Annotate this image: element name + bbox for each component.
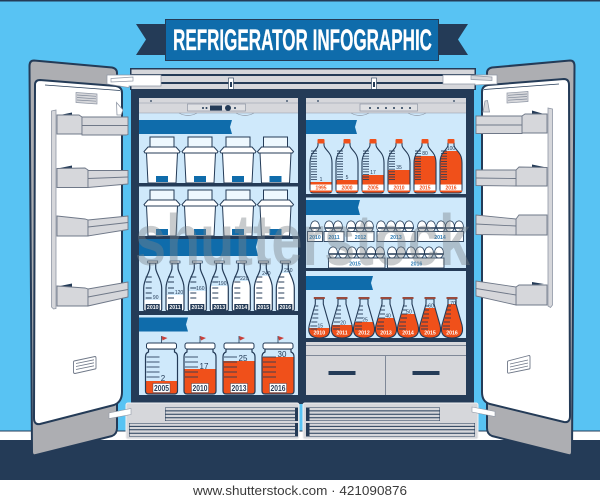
door rail <box>548 108 552 308</box>
milk bottles: 160 <box>196 286 205 292</box>
egg cartons row 2 <box>328 247 444 268</box>
milk bottles: 2013 <box>214 305 225 311</box>
left door <box>30 60 128 455</box>
flasks: 70 <box>450 301 456 307</box>
jars: 30 <box>278 350 287 359</box>
bottom hinge right <box>472 407 495 416</box>
egg cartons row 1: 2013 <box>390 235 402 241</box>
large bottles: 1 <box>320 177 323 183</box>
flasks: 15 <box>318 324 323 330</box>
banner left tail <box>136 24 166 55</box>
refrigerator top header <box>130 68 476 90</box>
egg cartons row 2: 2016 <box>411 261 422 267</box>
door catch <box>116 102 123 115</box>
flasks: 2016 <box>446 331 458 337</box>
door bin 4 <box>476 281 547 305</box>
jars: 2016 <box>271 383 286 393</box>
large bottles: 2010 <box>393 185 405 191</box>
flasks <box>306 297 465 339</box>
floor <box>0 440 600 480</box>
milk bottles: 190 <box>218 281 227 287</box>
left interior <box>139 98 298 395</box>
jars <box>144 336 295 395</box>
egg cartons row 1: 2010 <box>309 235 321 241</box>
shelf <box>306 338 466 342</box>
door catch <box>483 100 490 112</box>
jars: 25 <box>239 354 248 363</box>
milk bottles: 2012 <box>192 305 203 311</box>
milk bottles: 120 <box>175 290 183 296</box>
left control strip <box>139 98 298 116</box>
containers row 1 <box>144 137 294 183</box>
top hinge left <box>107 75 161 88</box>
jars: 2 <box>161 374 166 383</box>
milk bottles: 240 <box>262 271 271 277</box>
milk bottles: 2014 <box>236 305 247 311</box>
large bottles: 80 <box>422 151 428 157</box>
door bin 1 <box>57 112 128 135</box>
banner plate <box>166 20 438 60</box>
shelf <box>139 183 298 186</box>
top hinge right <box>443 75 497 85</box>
banner right tail <box>438 24 468 55</box>
large bottles: 2015 <box>419 185 431 191</box>
door back panel <box>30 60 117 455</box>
door bin 1 <box>476 110 547 134</box>
milk bottles: 220 <box>240 276 249 282</box>
milk bottles: 90 <box>153 295 159 301</box>
flasks: 2014 <box>402 331 414 337</box>
left compartment <box>139 98 298 395</box>
flasks: 2011 <box>336 331 348 337</box>
large bottles: 2005 <box>367 185 379 191</box>
top vent <box>76 92 97 104</box>
door bin 2 <box>57 166 128 188</box>
ribbon 4 <box>306 120 357 134</box>
baseboard <box>0 430 600 440</box>
ribbon 2 <box>139 239 258 256</box>
door bin 3 <box>476 215 547 235</box>
door bin 2 <box>476 164 547 186</box>
egg cartons row 1: 2014 <box>434 235 446 241</box>
base unit right <box>303 403 600 439</box>
lower vent <box>508 356 530 373</box>
door front panel <box>482 79 570 422</box>
jars: 17 <box>200 362 209 371</box>
ribbon 3 <box>139 318 188 332</box>
refrigerator body <box>131 89 474 404</box>
shelf <box>139 311 298 315</box>
flasks: 50 <box>406 310 412 316</box>
flasks: 25 <box>362 318 368 324</box>
door bin 4 <box>57 282 128 306</box>
jars: 2013 <box>232 383 247 393</box>
top vent <box>507 92 528 103</box>
shelf <box>306 194 466 198</box>
egg cartons row 1 <box>308 221 464 242</box>
jars: 2010 <box>193 383 208 393</box>
flasks: 2010 <box>314 331 325 337</box>
large bottles: 100 <box>447 146 455 152</box>
flasks: 60 <box>428 304 434 310</box>
ribbon 1 <box>139 120 232 134</box>
flasks: 2015 <box>424 331 436 337</box>
containers row 2 <box>144 190 294 236</box>
door front panel <box>34 80 122 424</box>
door bin 3 <box>57 216 128 236</box>
flasks: 40 <box>385 314 391 320</box>
egg cartons row 1: 2012 <box>355 235 366 241</box>
right door <box>476 60 574 455</box>
large bottles: 2016 <box>445 185 457 191</box>
drawers <box>306 342 466 395</box>
image id caption: www.shutterstock.com · 421090876 <box>192 483 407 498</box>
milk bottles: 250 <box>284 268 293 274</box>
right control strip <box>306 98 466 116</box>
jars: 2005 <box>154 383 169 393</box>
right compartment <box>306 98 466 395</box>
egg cartons row 2: 2015 <box>349 261 361 267</box>
large bottles: 1995 <box>315 185 327 191</box>
ribbon 6 <box>306 276 373 290</box>
watermark: shutterstock <box>135 201 471 281</box>
large bottles <box>309 139 463 194</box>
large bottles: 2000 <box>341 185 353 191</box>
large bottles: 5 <box>346 175 349 181</box>
door rail <box>52 110 56 309</box>
door back panel <box>487 60 574 455</box>
title banner <box>136 20 468 60</box>
milk bottles <box>143 261 295 311</box>
milk bottles: 2016 <box>280 305 291 311</box>
milk bottles: 2010 <box>147 305 159 311</box>
flasks: 2013 <box>380 331 392 337</box>
flasks: 2012 <box>358 331 370 337</box>
ribbon 5 <box>306 200 360 215</box>
egg cartons row 1: 2011 <box>328 235 340 241</box>
lower vent <box>74 356 96 374</box>
large bottles: 17 <box>370 170 376 176</box>
milk bottles: 2015 <box>258 305 269 311</box>
milk bottles: 2011 <box>169 305 181 311</box>
shelf <box>139 236 298 239</box>
large bottles: 35 <box>396 165 402 171</box>
shelf <box>306 268 466 271</box>
bottom hinge left <box>109 408 131 418</box>
flasks: 20 <box>340 320 346 326</box>
base unit left <box>126 403 600 439</box>
right interior <box>306 98 466 395</box>
